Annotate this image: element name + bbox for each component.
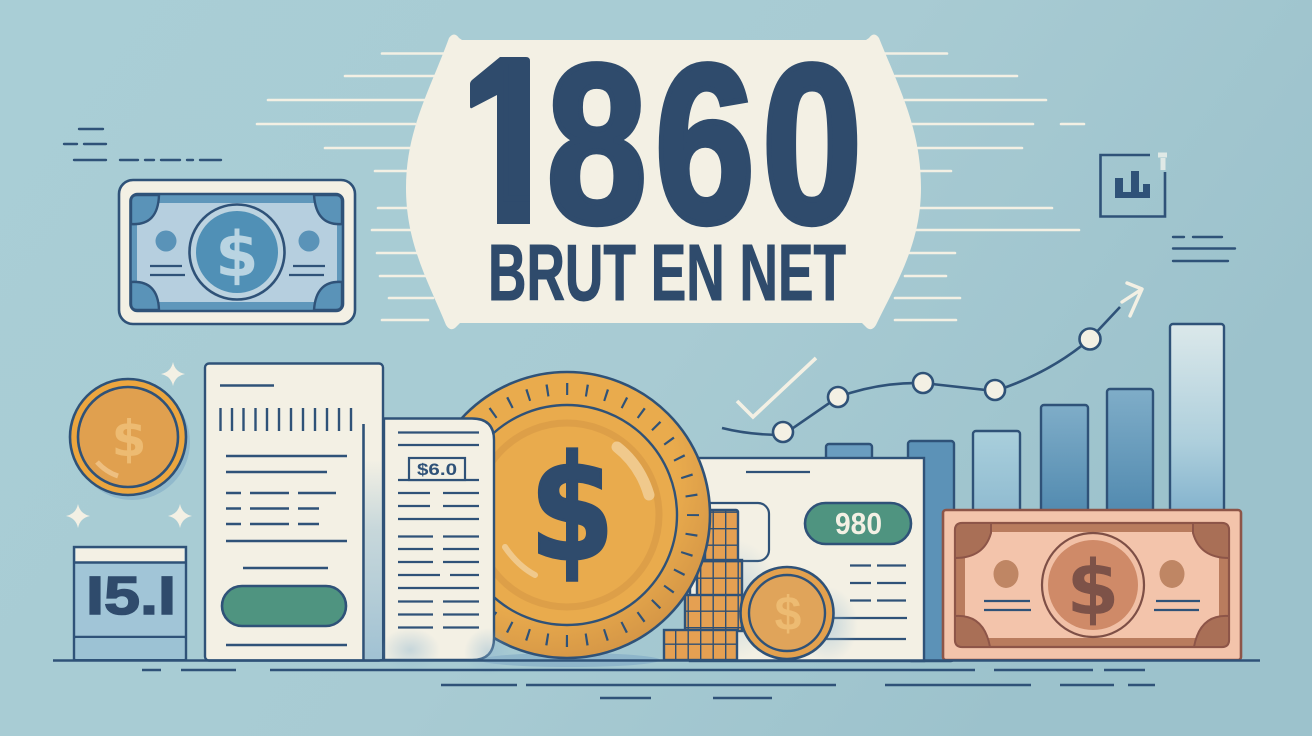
- check mark: [737, 358, 816, 417]
- arrow head: [1122, 283, 1142, 316]
- coin dollar sign: $: [530, 425, 614, 594]
- barcode: [220, 408, 351, 431]
- title number: [470, 57, 858, 228]
- bar chart: [826, 324, 1224, 661]
- coin stack: [664, 510, 742, 660]
- big gold coin: [424, 372, 710, 667]
- pink banknote: $: [1067, 543, 1119, 632]
- pink banknote: [943, 510, 1241, 660]
- amount box: [409, 458, 465, 480]
- note corners: [131, 195, 342, 310]
- subtitle: BRUT EN NET: [488, 228, 846, 317]
- note medallion: [190, 204, 284, 300]
- small navy dashes top left: [64, 129, 221, 160]
- green pill: [805, 503, 911, 544]
- title number: 1: [439, 19, 539, 271]
- receipt left: [205, 364, 383, 660]
- cream speed lines around title: [257, 54, 1084, 320]
- sparkles: [66, 362, 192, 528]
- blue card 15.1: I5.I: [86, 566, 176, 626]
- receipt right: [380, 418, 512, 676]
- left gold coin: $: [112, 410, 146, 468]
- blue banknote: $: [215, 218, 259, 291]
- small chart icon: [1100, 155, 1167, 216]
- left gold coin: [70, 379, 190, 500]
- ground line and dashes: [53, 659, 1260, 662]
- small gold coin: $: [775, 588, 802, 641]
- blue banknote: [119, 180, 355, 324]
- title plate: [406, 19, 921, 329]
- note medallion: [1042, 533, 1144, 637]
- green pill: [222, 586, 346, 626]
- receipt right: $6.0: [417, 460, 457, 479]
- small navy dashes right: [1173, 237, 1235, 261]
- line chart with check and arrow: [722, 283, 1142, 442]
- document with green pill: [690, 458, 924, 663]
- document with green pill: 980: [835, 506, 882, 541]
- blue card 15.1: [74, 547, 186, 660]
- small gold coin: [740, 567, 834, 659]
- title number: 860: [547, 19, 862, 271]
- note corners: [955, 523, 1229, 647]
